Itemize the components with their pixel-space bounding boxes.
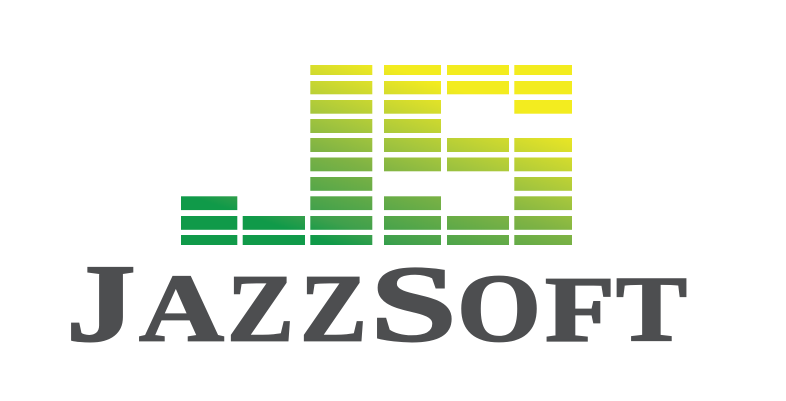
icon: equalizer bars forming JS monogram	[181, 65, 572, 245]
wordmark: JazzSoft: Z	[227, 254, 294, 362]
wordmark: JazzSoft: O	[457, 254, 541, 362]
wordmark: JazzSoft: T	[616, 258, 687, 362]
wordmark: JazzSoft: Z	[300, 254, 367, 362]
wordmark: JazzSoft: J	[66, 242, 136, 366]
wordmark: JazzSoft: F	[545, 258, 615, 362]
wordmark: JazzSoft: S	[370, 244, 457, 364]
wordmark: JazzSoft: A	[139, 254, 224, 362]
